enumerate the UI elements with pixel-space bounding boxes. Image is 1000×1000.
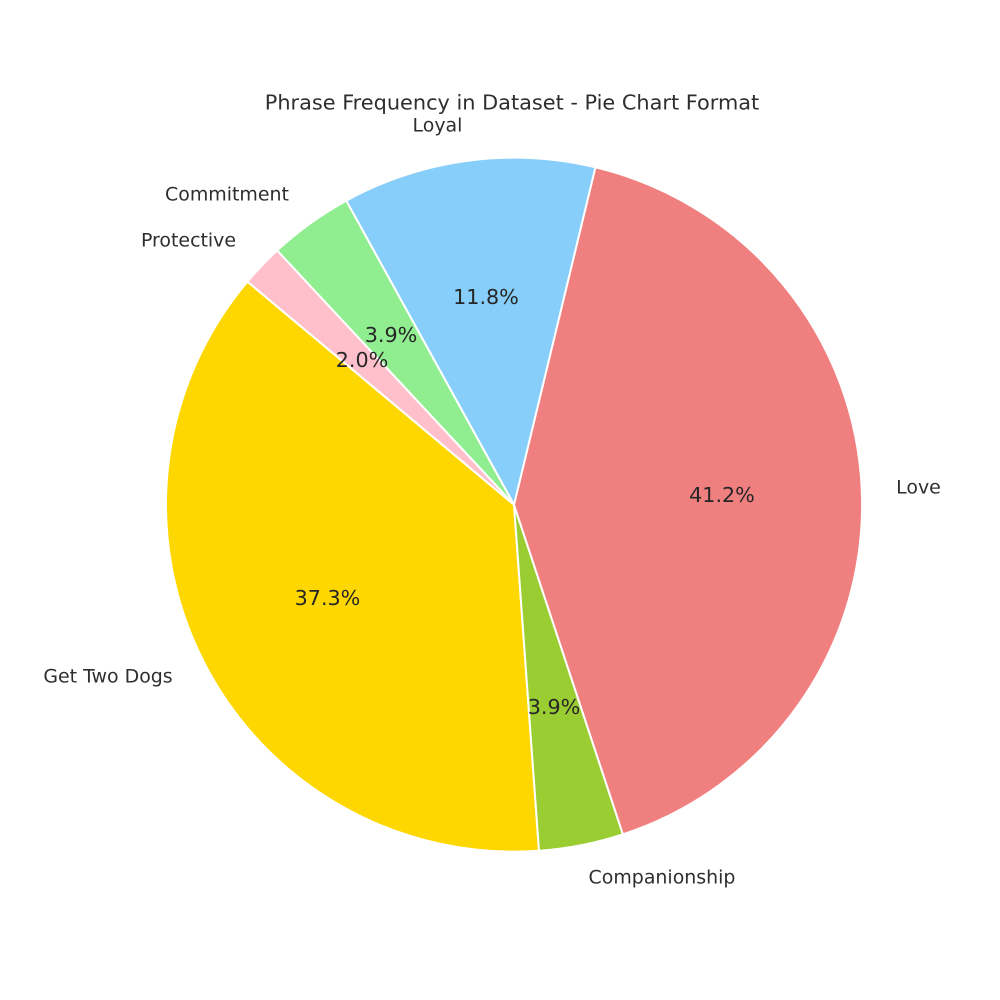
slice: Get Two Dogs: [166, 282, 539, 852]
label: Love: Love: [896, 476, 941, 498]
percent: Commitment: 3.9%: [365, 323, 417, 347]
percent: Get Two Dogs: 37.3%: [295, 586, 360, 610]
slice: Commitment: [277, 201, 514, 505]
slice: Loyal: [346, 158, 595, 505]
label: Protective: Protective: [141, 230, 236, 252]
label: Get Two Dogs: Get Two Dogs: [43, 666, 173, 688]
title: Phrase Frequency in Dataset - Pie Chart Format: [265, 90, 759, 114]
percent: Loyal: 11.8%: [453, 285, 519, 309]
percent: Companionship: 3.9%: [528, 695, 580, 719]
label: Commitment: Commitment: [165, 184, 289, 206]
slice: Love: [514, 167, 862, 834]
pie chart: [166, 158, 862, 852]
percent: Protective: 2.0%: [336, 348, 388, 372]
percent: Love: 41.2%: [689, 483, 755, 507]
slice: Protective: [247, 250, 514, 505]
label: Loyal: Loyal: [413, 114, 462, 136]
label: Companionship: Companionship: [589, 866, 735, 888]
slice: Companionship: [514, 505, 623, 851]
